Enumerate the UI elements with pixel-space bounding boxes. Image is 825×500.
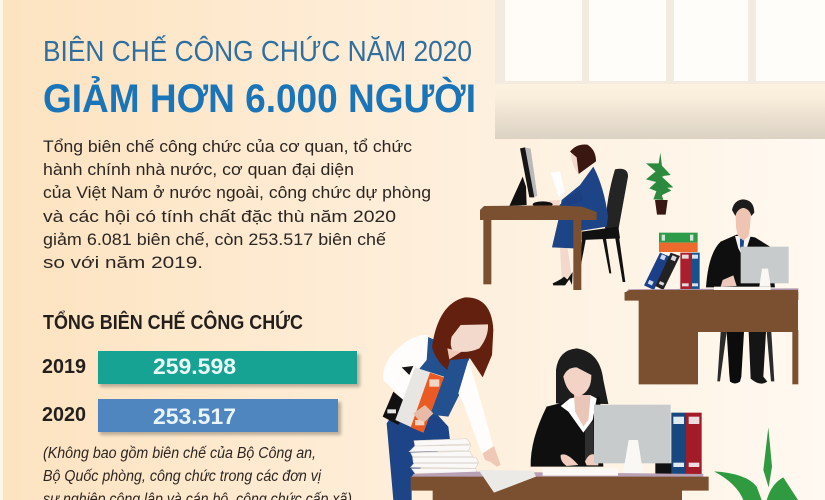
plant [646, 153, 673, 215]
loose paper [479, 470, 536, 493]
illustration: lower office [383, 290, 798, 500]
standing woman [383, 297, 501, 500]
footnote: Bộ Quốc phòng, công chức trong các đơn vị [43, 468, 321, 485]
woman at desk [548, 144, 608, 285]
text block: intro: so với năm 2019. [43, 253, 203, 272]
chair [579, 169, 628, 282]
title: BIÊN CHẾ CÔNG CHỨC NĂM 2020 [43, 34, 472, 68]
text block: intro: hành chính nhà nước, cơ quan đại diện [43, 160, 354, 179]
window [495, 0, 825, 139]
desk top right [625, 287, 798, 300]
title: GIẢM HƠN 6.000 NGƯỜI [43, 75, 476, 121]
desk [480, 205, 597, 290]
man at desk [706, 199, 789, 287]
bar chart [42, 351, 360, 435]
text block: intro [43, 137, 431, 272]
binders lower [655, 413, 702, 475]
desk right base [625, 290, 798, 384]
seated woman [531, 348, 608, 467]
title [43, 34, 476, 121]
paper stack [409, 439, 479, 473]
bar 2019: 2019 [42, 356, 86, 378]
text block: intro: Tổng biên chế công chức của cơ quan, tổ chức [43, 137, 413, 156]
text block: intro: giảm 6.081 biên chế, còn 253.517 biên chế [43, 230, 387, 249]
text block: intro: của Việt Nam ở nước ngoài, công chức dự phòng [43, 183, 431, 202]
footnote [43, 445, 352, 500]
bar 2020 [42, 399, 341, 435]
text block: intro: và các hội có tính chất đặc thù năm 2020 [43, 207, 396, 226]
books [644, 233, 700, 291]
bar 2020: 253.517 [153, 404, 236, 429]
plant lower [714, 427, 798, 500]
man legs [717, 332, 774, 384]
footnote: (Không bao gồm biên chế của Bộ Công an, [43, 445, 316, 462]
front desk [411, 468, 709, 500]
bar 2019: 259.598 [153, 354, 236, 379]
illustration: upper office [480, 144, 798, 300]
bar 2020: 2020 [42, 404, 86, 426]
chart heading: TỔNG BIÊN CHẾ CÔNG CHỨC [43, 310, 303, 334]
bar 2019 [42, 351, 360, 387]
monitor lower [594, 405, 671, 475]
monitor [509, 147, 553, 207]
